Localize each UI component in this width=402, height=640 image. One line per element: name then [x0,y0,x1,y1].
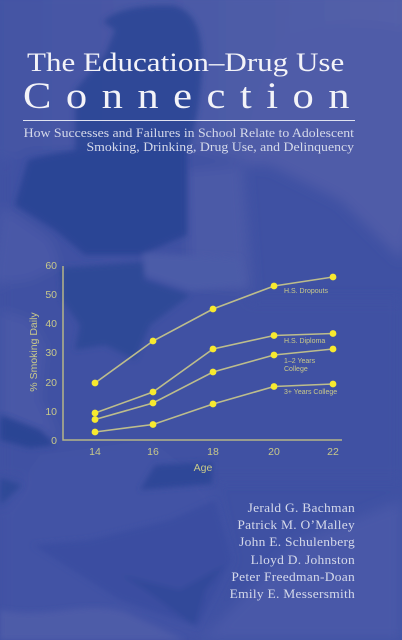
authors: Peter Freedman-Doan [231,569,355,584]
authors: Jerald G. Bachman [248,500,355,515]
y axis tick labels: 0 [51,435,57,447]
x axis tick labels: 18 [207,446,219,458]
title line 2: Connection [23,76,364,117]
title line 1: The Education–Drug Use [27,48,344,77]
subtitle: How Successes and Failures in School Relate to Adolescent [24,125,354,140]
series: H.S. Diploma [92,330,336,416]
series labels [284,288,337,396]
series: H.S. Dropouts [92,274,336,386]
x axis tick labels: 20 [268,446,280,458]
y axis tick labels: 50 [45,289,57,301]
series: 3+ Years College [92,381,336,435]
y axis tick labels: 60 [45,260,57,272]
authors [230,500,355,601]
axes [63,266,342,440]
series labels: 3+ Years College [284,389,337,396]
x axis tick labels [89,446,339,458]
series labels: H.S. Dropouts [284,288,328,295]
x axis title: Age [194,462,212,474]
series: 1-2 Years College [92,346,336,423]
subtitle [24,125,354,154]
series labels: 1–2 Years [284,358,316,365]
authors: Emily E. Messersmith [230,586,355,601]
title rule [23,120,355,121]
x axis tick labels: 22 [327,446,339,458]
y axis tick labels [45,260,57,447]
y axis tick labels: 20 [45,377,57,389]
title [23,48,364,117]
series labels: College [284,366,308,373]
y axis tick labels: 40 [45,318,57,330]
authors: Lloyd D. Johnston [251,552,355,567]
authors: John E. Schulenberg [239,534,355,549]
series labels: H.S. Diploma [284,338,325,345]
y axis title: % Smoking Daily [28,312,40,392]
y axis tick labels: 10 [45,406,57,418]
subtitle: Smoking, Drinking, Drug Use, and Delinquency [86,139,354,154]
authors: Patrick M. O’Malley [237,517,355,532]
y axis tick labels: 30 [45,347,57,359]
x axis tick labels: 14 [89,446,101,458]
x axis tick labels: 16 [147,446,159,458]
